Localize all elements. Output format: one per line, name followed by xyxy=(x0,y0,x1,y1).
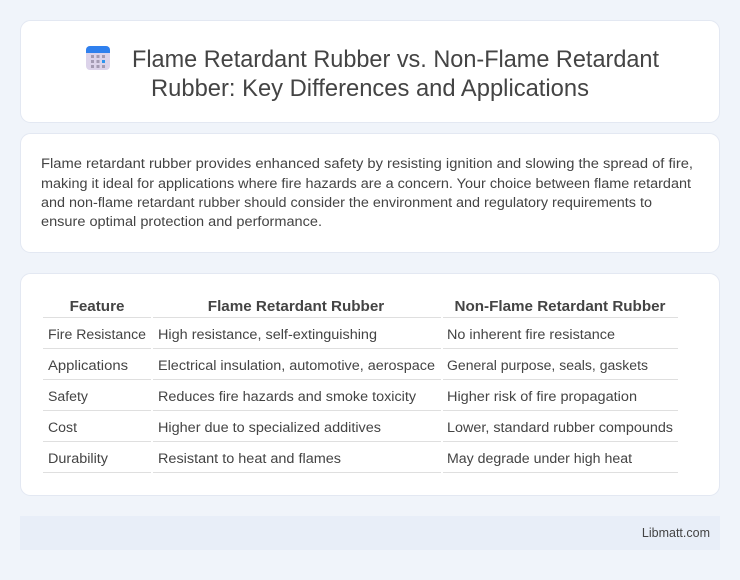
table row: cost: Higher due to specialized additives xyxy=(158,420,381,436)
table header row: Feature xyxy=(70,298,124,315)
table row: cost xyxy=(48,420,673,436)
table header row xyxy=(70,298,666,315)
heading: Rubber: Key Differences and Applications xyxy=(151,75,589,102)
text block: introduction: and non-flame retardant rubber should consider the environment and regulatory requirements to xyxy=(41,195,652,211)
panel: comparison table xyxy=(20,274,720,496)
table row: safety: Safety xyxy=(48,389,89,405)
table row: fire resistance: No inherent fire resistance xyxy=(447,327,615,343)
panel: title card xyxy=(20,20,720,122)
table row: durability xyxy=(48,451,632,467)
table row: durability: Resistant to heat and flames xyxy=(158,451,341,467)
text block: introduction: ensure optimal protection and performance. xyxy=(41,214,322,230)
table header row: Non-Flame Retardant Rubber xyxy=(455,298,666,315)
table header row: Flame Retardant Rubber xyxy=(208,298,384,315)
table row: applications: Applications xyxy=(48,358,128,374)
panel: introduction xyxy=(20,134,720,252)
table row: applications xyxy=(48,358,648,374)
table row: applications: General purpose, seals, gaskets xyxy=(447,358,648,374)
table row: safety: Higher risk of fire propagation xyxy=(447,389,637,405)
table row: fire resistance: Fire Resistance xyxy=(48,327,146,343)
table row: fire resistance xyxy=(48,327,615,343)
table row: durability: May degrade under high heat xyxy=(447,451,632,467)
table row: durability: Durability xyxy=(48,451,109,467)
table row: fire resistance: High resistance, self-extinguishing xyxy=(158,327,377,343)
text block: introduction: Flame retardant rubber provides enhanced safety by resisting ignition and slowing the spread of fire, xyxy=(41,156,693,172)
heading: Flame Retardant Rubber vs. Non-Flame Retardant xyxy=(132,46,659,73)
footer credit: Libmatt.com xyxy=(642,526,710,540)
table row: cost: Lower, standard rubber compounds xyxy=(447,420,673,436)
text block: introduction xyxy=(41,156,693,230)
table row: applications: Electrical insulation, automotive, aerospace xyxy=(158,358,435,374)
icon: calendar grid xyxy=(86,46,110,70)
heading xyxy=(132,46,659,102)
text block: introduction: making it ideal for applications where fire hazards are a concern. Your choice between flame retardant xyxy=(41,176,691,192)
footer bar xyxy=(20,516,720,550)
table row: cost: Cost xyxy=(48,420,77,436)
table row: safety xyxy=(48,389,637,405)
table row: safety: Reduces fire hazards and smoke toxicity xyxy=(158,389,417,405)
